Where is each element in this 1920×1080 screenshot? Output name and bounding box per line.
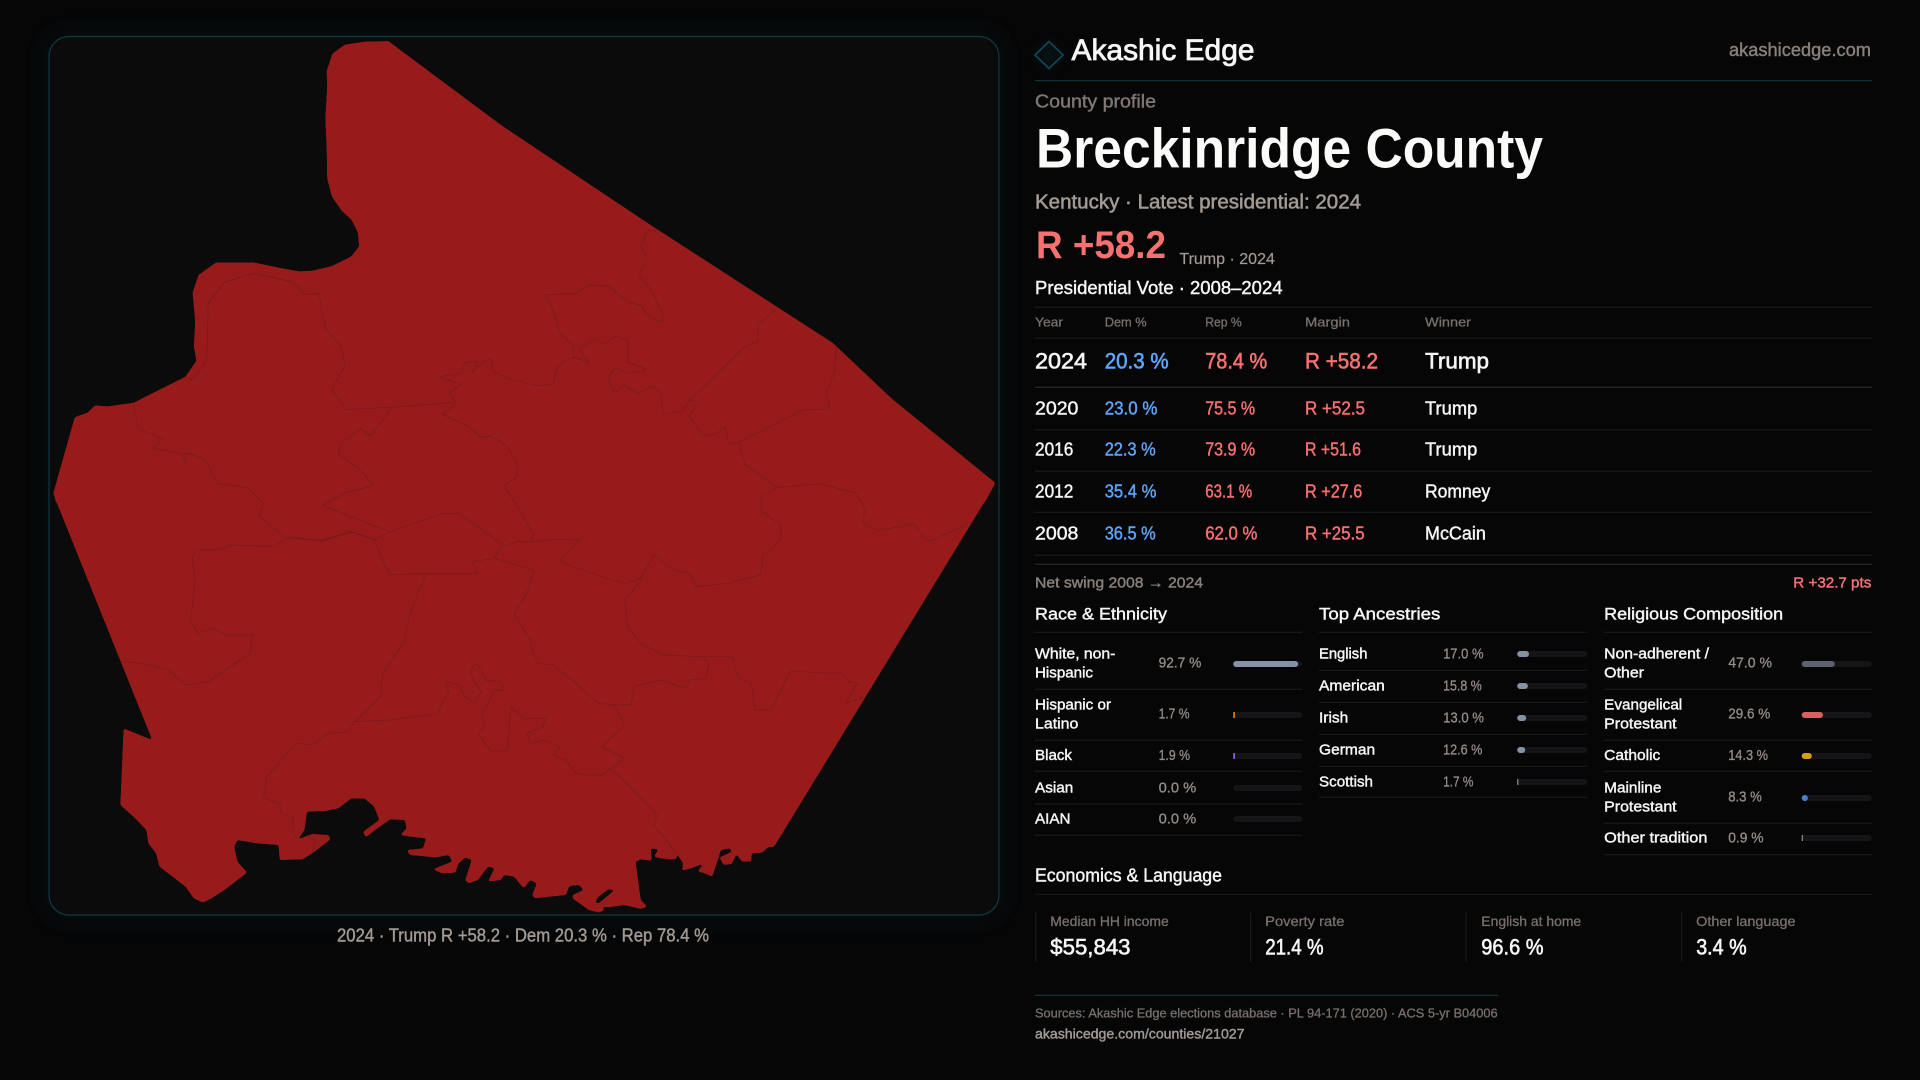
- footer: sources: Sources: Akashic Edge elections database · PL 94-171 (2020) · ACS 5-yr B04006: [1035, 1005, 1498, 1020]
- row 2012: 2012: [1035, 481, 1073, 501]
- row white: [1035, 645, 1302, 681]
- row 2012: Romney: [1425, 481, 1490, 501]
- heading: Economics & Language: [1035, 866, 1222, 886]
- site url: akashicedge.com: [1729, 40, 1871, 60]
- row scottish: Scottish: [1319, 774, 1373, 791]
- row other tradition: Other tradition: [1604, 829, 1707, 846]
- icon: diamond logo: [1035, 41, 1063, 69]
- stat: english at home: 96.6 %: [1481, 934, 1544, 959]
- row hispanic: Latino: [1035, 715, 1078, 732]
- headline margin: R +58.2: [1036, 224, 1166, 267]
- header: brand: [1035, 34, 1871, 69]
- row aian: [1035, 810, 1302, 827]
- row asian: 0.0 %: [1159, 779, 1196, 796]
- row black: Black: [1035, 747, 1072, 764]
- row american: [1319, 678, 1587, 695]
- row 2016: [1035, 440, 1477, 460]
- row mainline: [1604, 779, 1872, 815]
- row white: Hispanic: [1035, 664, 1093, 681]
- subtitle: Kentucky · Latest presidential: 2024: [1035, 191, 1361, 213]
- heading: presidential vote: Presidential Vote · 2008–2024: [1035, 278, 1282, 298]
- row 2016: Trump: [1425, 440, 1477, 460]
- row 2024: 2024: [1035, 348, 1087, 373]
- row mainline: Protestant: [1604, 798, 1677, 815]
- stat: median income: $55,843: [1050, 934, 1130, 959]
- row 2016: 2016: [1035, 440, 1073, 460]
- row catholic: 14.3 %: [1728, 747, 1768, 764]
- row 2024: R +58.2: [1305, 348, 1378, 373]
- row non-adherent: Other: [1604, 664, 1644, 681]
- row 2008: 36.5 %: [1105, 523, 1156, 543]
- county map shape: [53, 41, 995, 913]
- row english: [1319, 645, 1587, 662]
- row german: 12.6 %: [1443, 742, 1482, 759]
- row american: 15.8 %: [1443, 678, 1482, 695]
- panel: religious composition: [1604, 604, 1872, 855]
- row english: 17.0 %: [1443, 645, 1484, 662]
- row 2012: [1035, 481, 1490, 501]
- panel: top ancestries: [1319, 604, 1587, 797]
- footer: sources: akashicedge.com/counties/21027: [1035, 1025, 1245, 1041]
- map caption: 2024 · Trump R +58.2 · Dem 20.3 % · Rep 78.4 %: [337, 926, 709, 946]
- headline margin: Trump · 2024: [1179, 251, 1275, 268]
- row 2008: 62.0 %: [1205, 523, 1257, 543]
- net swing: [1035, 575, 1871, 591]
- stat: other language: Other language: [1696, 913, 1796, 929]
- stat: poverty rate: 21.4 %: [1265, 934, 1324, 959]
- row 2016: 73.9 %: [1205, 440, 1255, 460]
- row hispanic: Hispanic or: [1035, 696, 1111, 713]
- row catholic: [1604, 747, 1872, 764]
- row 2020: 75.5 %: [1205, 398, 1255, 418]
- row 2024: Trump: [1425, 348, 1489, 373]
- row scottish: [1319, 774, 1587, 791]
- heading: Top Ancestries: [1319, 604, 1440, 623]
- row asian: Asian: [1035, 779, 1073, 796]
- row 2020: R +52.5: [1305, 398, 1365, 418]
- panel: race and ethnicity: [1035, 604, 1302, 835]
- stat: median income: Median HH income: [1050, 913, 1169, 929]
- stat: english at home: English at home: [1481, 913, 1581, 929]
- row evangelical: Protestant: [1604, 715, 1677, 732]
- row 2008: 2008: [1035, 523, 1078, 543]
- row other tradition: [1604, 829, 1872, 846]
- stat: other language: [1682, 913, 1796, 962]
- row aian: AIAN: [1035, 810, 1070, 827]
- brand name: Akashic Edge: [1072, 34, 1254, 67]
- row black: [1035, 747, 1302, 764]
- row 2008: [1035, 523, 1486, 543]
- row 2020: [1035, 398, 1477, 418]
- row american: American: [1319, 678, 1385, 695]
- row hispanic: [1035, 696, 1302, 732]
- row hispanic: 1.7 %: [1159, 705, 1190, 722]
- row evangelical: [1604, 696, 1872, 732]
- row black: 1.9 %: [1159, 747, 1190, 764]
- table header: Year: [1035, 315, 1064, 330]
- row 2024: [1035, 348, 1489, 373]
- row 2024: 78.4 %: [1205, 348, 1267, 373]
- headline margin: [1036, 224, 1275, 268]
- row white: 92.7 %: [1159, 654, 1201, 671]
- row irish: 13.0 %: [1443, 710, 1484, 727]
- row asian: [1035, 779, 1302, 796]
- row 2020: Trump: [1425, 398, 1477, 418]
- row 2008: R +25.5: [1305, 523, 1365, 543]
- table header: Rep %: [1205, 315, 1242, 330]
- stat: poverty rate: Poverty rate: [1265, 913, 1345, 929]
- eyebrow: County profile: [1035, 91, 1156, 111]
- stat: median income: [1036, 913, 1169, 962]
- row german: German: [1319, 742, 1375, 759]
- panel: economics and language: [1035, 866, 1872, 962]
- table header: Margin: [1305, 315, 1350, 330]
- row 2016: 22.3 %: [1105, 440, 1156, 460]
- row 2012: R +27.6: [1305, 481, 1362, 501]
- title: Breckinridge County: [1036, 116, 1543, 179]
- panel: county map: [49, 36, 999, 915]
- row other tradition: 0.9 %: [1728, 829, 1764, 846]
- row non-adherent: Non-adherent /: [1604, 645, 1710, 662]
- row 2008: McCain: [1425, 523, 1486, 543]
- row irish: Irish: [1319, 710, 1348, 727]
- row mainline: 8.3 %: [1728, 789, 1762, 806]
- table: presidential vote: [1035, 307, 1872, 555]
- row 2020: 2020: [1035, 398, 1078, 418]
- row 2020: 23.0 %: [1105, 398, 1158, 418]
- row non-adherent: 47.0 %: [1728, 654, 1772, 671]
- stat: poverty rate: [1251, 913, 1345, 962]
- stat: english at home: [1466, 913, 1581, 962]
- row irish: [1319, 710, 1587, 727]
- row 2016: R +51.6: [1305, 440, 1361, 460]
- row german: [1319, 742, 1587, 759]
- row 2012: 35.4 %: [1105, 481, 1156, 501]
- row white: White, non-: [1035, 645, 1115, 662]
- row non-adherent: [1604, 645, 1872, 681]
- net swing: Net swing 2008 → 2024: [1035, 575, 1203, 591]
- net swing: R +32.7 pts: [1793, 575, 1871, 591]
- row 2024: 20.3 %: [1105, 348, 1169, 373]
- row mainline: Mainline: [1604, 779, 1661, 796]
- row evangelical: Evangelical: [1604, 696, 1682, 713]
- row 2012: 63.1 %: [1205, 481, 1252, 501]
- table header: Winner: [1425, 315, 1472, 330]
- row evangelical: 29.6 %: [1728, 705, 1770, 722]
- table header: Dem %: [1105, 315, 1147, 330]
- table header: [1035, 315, 1472, 330]
- row scottish: 1.7 %: [1443, 774, 1473, 791]
- heading: Religious Composition: [1604, 604, 1783, 623]
- footer: sources: [1035, 1005, 1498, 1041]
- row english: English: [1319, 645, 1367, 662]
- row catholic: Catholic: [1604, 747, 1661, 764]
- row aian: 0.0 %: [1159, 810, 1196, 827]
- heading: Race & Ethnicity: [1035, 604, 1168, 623]
- stat: other language: 3.4 %: [1696, 934, 1747, 959]
